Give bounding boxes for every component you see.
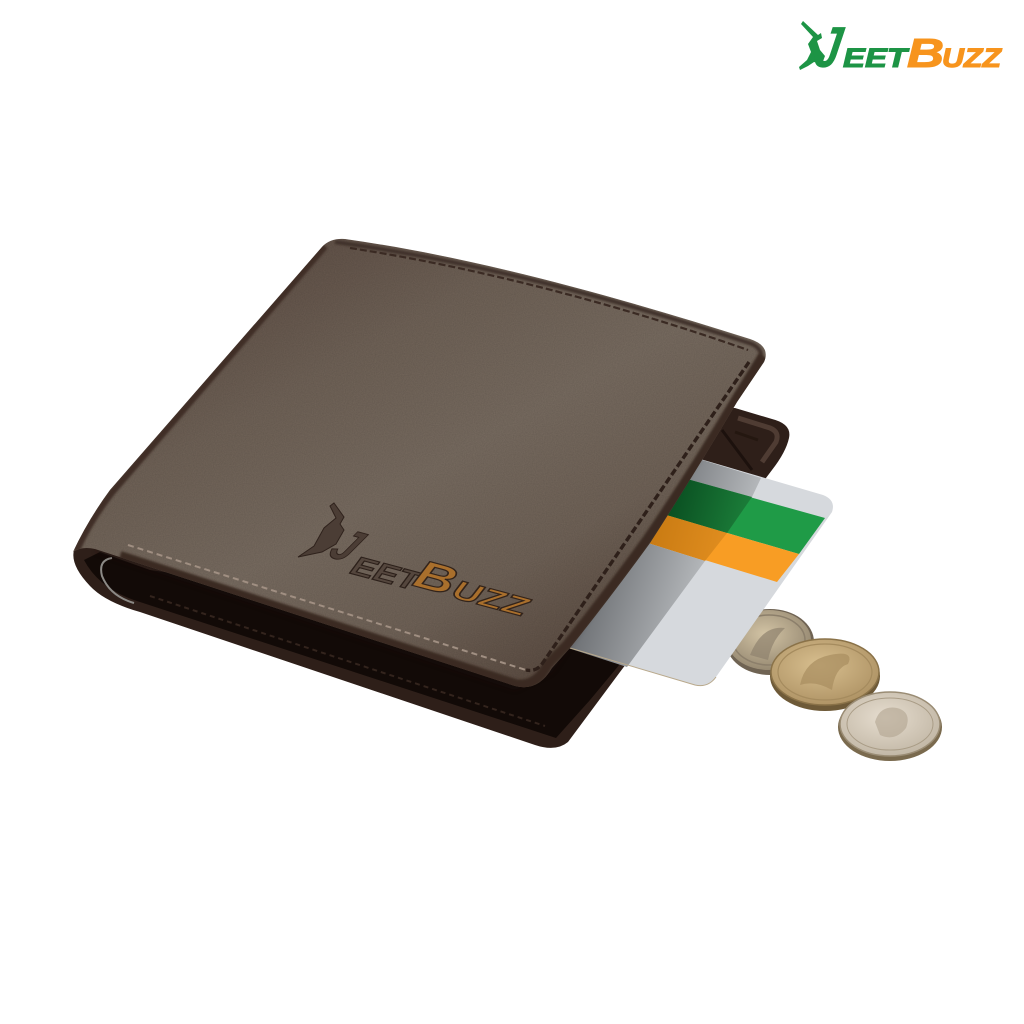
logo: JeetBuzz: [799, 15, 1003, 80]
embossed player icon: [298, 503, 344, 557]
embossed JEET: EET: [347, 550, 428, 597]
flap left edge highlight: [76, 246, 325, 551]
embossed BUZZ: B: [407, 552, 464, 604]
embossed JEET: J: [319, 521, 375, 571]
card body: [540, 451, 833, 686]
leather grain: [70, 235, 770, 695]
logo text JEET: [810, 15, 910, 80]
logo text JEET: EET: [843, 43, 910, 73]
flap right edge: [120, 356, 763, 685]
card: [540, 451, 833, 686]
coin: middle: [770, 639, 880, 711]
logo player icon: [799, 21, 825, 70]
embossed BUZZ: [407, 552, 535, 623]
embossed logo on wallet: [298, 503, 535, 623]
wallet back panel: [73, 400, 789, 748]
wallet illustration with logo: [73, 21, 1003, 761]
logo text BUZZ: B: [907, 30, 944, 76]
embossed BUZZ: UZZ: [448, 574, 535, 623]
card orange stripe: [649, 515, 799, 582]
flap top edge: [335, 242, 761, 360]
wallet lower stitch: [150, 596, 545, 726]
wallet inner dark pocket: [84, 552, 640, 738]
coin: front: [838, 692, 942, 761]
logo text BUZZ: UZZ: [942, 43, 1003, 73]
card shaded lower: [540, 534, 705, 667]
logo text BUZZ: [907, 30, 1003, 76]
stitching bottom: [128, 545, 526, 670]
embossed JEET: [319, 521, 428, 597]
card bottom rim: [570, 648, 716, 686]
wallet front flap: [70, 235, 770, 695]
wallet left fold loop: [101, 558, 134, 603]
logo text JEET: J: [810, 15, 848, 80]
stitching top: [350, 248, 748, 350]
wallet flap shadow: [95, 450, 700, 690]
card shadow top: [655, 451, 761, 497]
coin: back: [726, 609, 814, 675]
stitching right: [526, 362, 749, 670]
card shaded orange: [619, 506, 727, 561]
card green stripe: [666, 479, 825, 554]
wallet back right stitching: [722, 418, 777, 470]
card shaded green: [636, 470, 752, 533]
